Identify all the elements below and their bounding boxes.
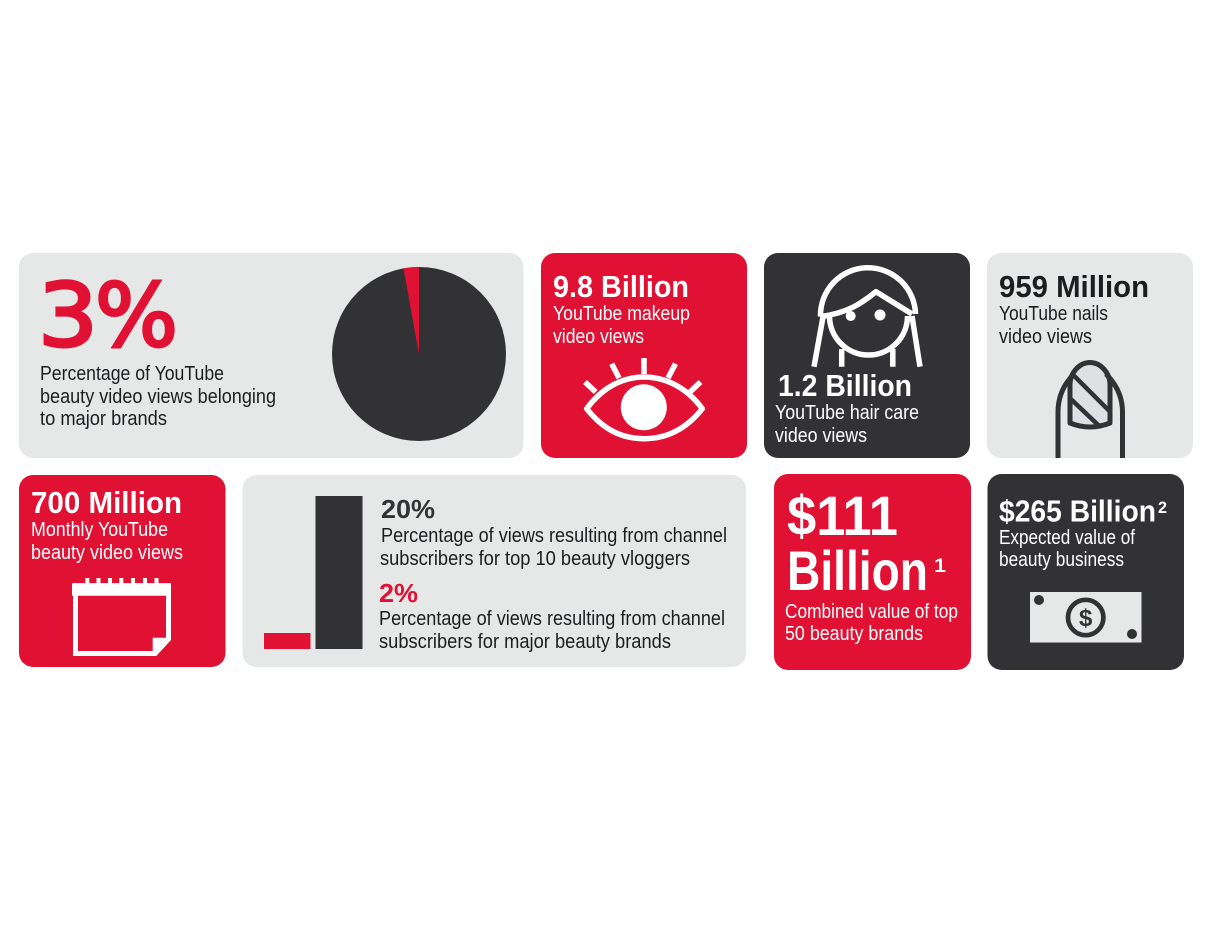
heading: 700 Million: 700 Million (31, 485, 182, 520)
text: makeup description (553, 303, 690, 348)
heading: $111 Billion (787, 484, 946, 602)
text: nails description: YouTube nails (999, 303, 1108, 325)
text: monthly description: Monthly YouTube (31, 519, 168, 541)
heading: 1.2 Billion: 1.2 Billion (778, 368, 912, 403)
icon: eye (585, 358, 702, 439)
text: makeup description: video views (553, 326, 644, 348)
text: nails description: video views (999, 326, 1092, 348)
heading: $111 Billion: 1 (934, 556, 946, 577)
text: combined value description: 50 beauty brands (785, 623, 923, 645)
text: top 10 vloggers description: subscribers for top 10 beauty vloggers (380, 548, 690, 570)
figure: 20%: 20% (381, 494, 435, 524)
text: monthly description (31, 519, 183, 564)
text: 3 percent description (40, 363, 276, 430)
heading: 9.8 Billion: 9.8 Billion (553, 269, 689, 304)
panel: 3 percent major brands (19, 253, 524, 458)
text: combined value description: Combined value of top (785, 601, 958, 623)
panel: makeup views (541, 253, 747, 458)
text: top 10 vloggers description (380, 525, 727, 570)
text: major brands description (379, 608, 725, 653)
panel: monthly views (19, 475, 226, 667)
pie chart: 3 percent share (332, 267, 506, 441)
panel: hair care views (764, 253, 970, 458)
panel: top 50 brand value (774, 474, 971, 670)
text: major brands description: Percentage of views resulting from channel (379, 608, 725, 630)
text: 3 percent description: beauty video views belonging (40, 386, 276, 408)
panel: expected beauty business value (988, 474, 1184, 670)
text: hair care description: YouTube hair care (775, 402, 919, 424)
text: monthly description: beauty video views (31, 542, 183, 564)
text: hair care description: video views (775, 425, 867, 447)
heading: $111 Billion: Billion (787, 539, 928, 602)
heading: $265 Billion: 2 (1158, 498, 1167, 517)
panel: subscriber view share (242, 475, 746, 667)
text: major brands description: subscribers for major beauty brands (379, 631, 671, 653)
panel: nails views (987, 253, 1193, 458)
icon: dollar bill (1030, 592, 1142, 642)
text: hair care description (775, 402, 919, 447)
figure: 2%: 2% (379, 578, 418, 608)
heading: 959 Million: 959 Million (999, 269, 1149, 304)
big figure: 3% (38, 265, 178, 367)
text: expected value description: beauty business (999, 549, 1124, 571)
icon: calendar (72, 578, 171, 656)
icon: painted fingernail (1058, 362, 1122, 458)
text: expected value description: Expected value of (999, 527, 1135, 549)
text: 3 percent description: to major brands (40, 408, 167, 430)
text: expected value description (999, 527, 1135, 571)
heading: $265 Billion: $265 Billion (999, 494, 1156, 528)
big figure: 3%: % (95, 265, 178, 367)
text: nails description (999, 303, 1108, 348)
text: makeup description: YouTube makeup (553, 303, 690, 325)
text: combined value description (785, 601, 958, 645)
icon: face with hair (814, 268, 920, 367)
text: 3 percent description: Percentage of YouTube (40, 363, 224, 385)
heading: $111 Billion: $111 (787, 484, 898, 547)
big figure: 3%: 3 (38, 265, 98, 367)
icon: dollar bill: $ (1079, 605, 1093, 632)
bar chart: 2 percent versus 20 percent (264, 496, 362, 649)
text: top 10 vloggers description: Percentage of views resulting from channel (381, 525, 727, 547)
